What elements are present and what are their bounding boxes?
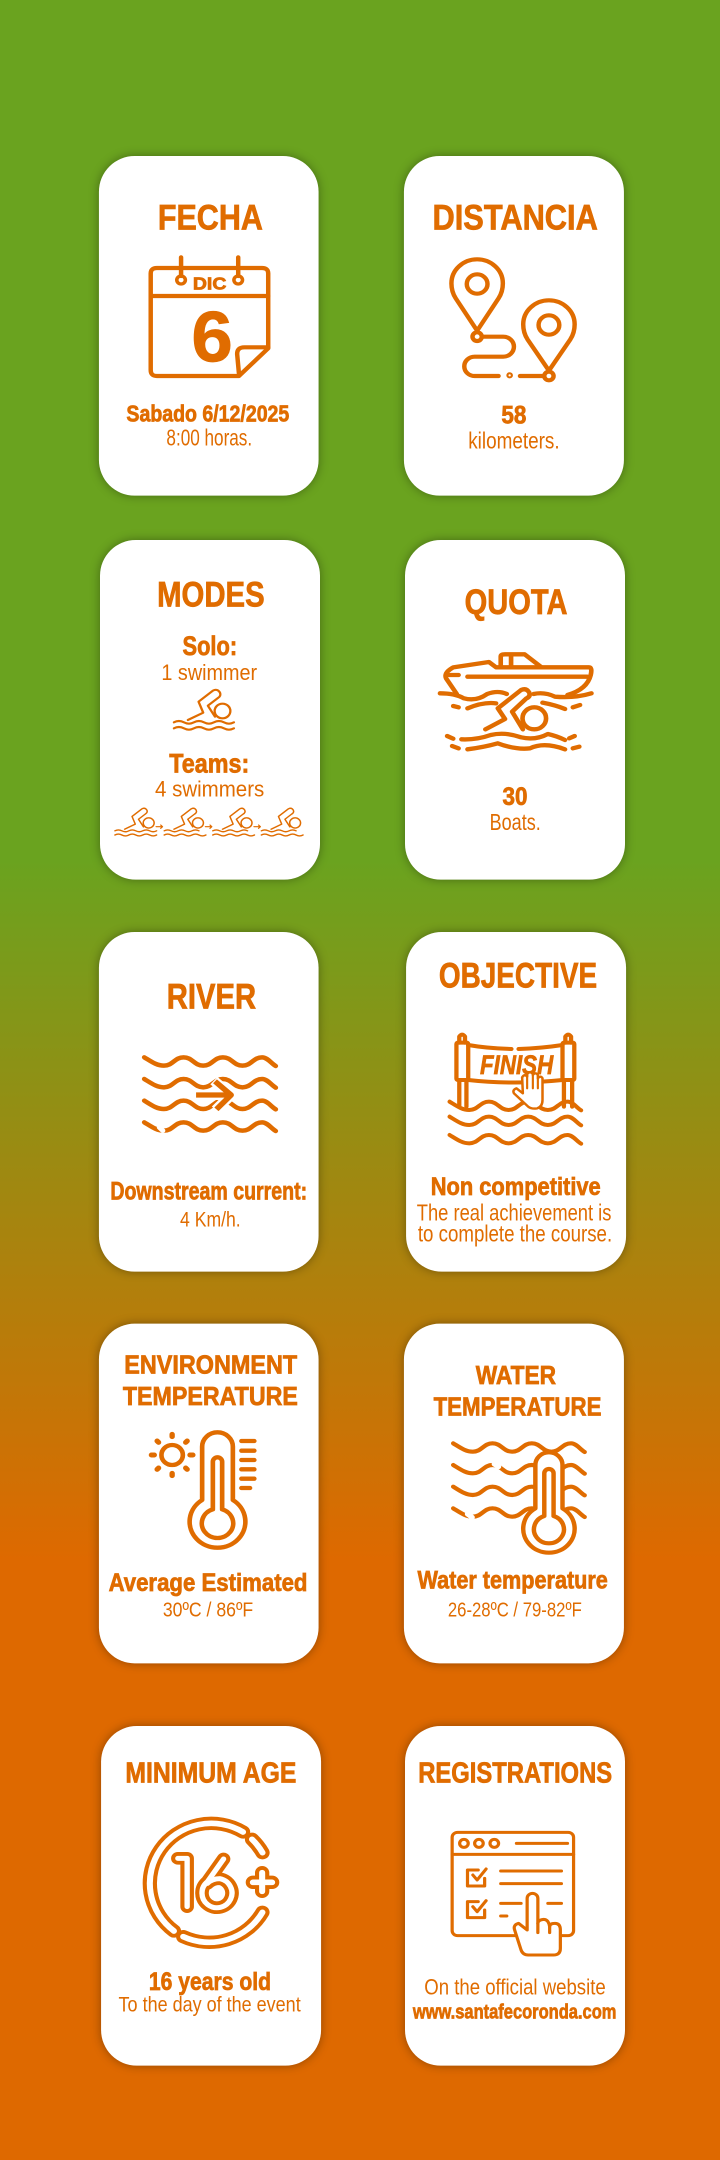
icon: route with two map pins	[451, 259, 575, 380]
panel: modes	[100, 540, 320, 880]
panel: fecha	[99, 156, 319, 496]
heading: distancia: DISTANCIA	[433, 197, 598, 237]
icon: calendar: 6	[191, 297, 233, 377]
date text: Sabado 6/12/2025	[126, 401, 289, 427]
panel: registrations	[405, 1726, 625, 2066]
solo count: 1 swimmer	[161, 660, 257, 685]
heading: water temperature: WATER	[476, 1361, 556, 1390]
solo label: Solo:	[183, 631, 237, 661]
icon: waves and thermometer	[453, 1443, 585, 1553]
icon: web form and pointing hand	[452, 1832, 574, 1955]
panel: objective	[406, 932, 626, 1272]
teams label: Teams:	[169, 748, 249, 778]
icon: calendar: DIC	[193, 274, 226, 293]
heading: objective: OBJECTIVE	[439, 955, 597, 995]
water label: Water temperature	[418, 1565, 608, 1594]
panel: minimum age	[101, 1726, 321, 2066]
heading: environment temperature	[123, 1350, 298, 1411]
icon: boat and swimmer	[440, 654, 591, 749]
teams count: 4 swimmers	[155, 776, 264, 801]
website address: www.santafecoronda.com	[412, 2000, 616, 2023]
panel: environment temperature	[99, 1324, 319, 1663]
heading: environment temperature: ENVIRONMENT	[124, 1350, 297, 1379]
heading: fecha: FECHA	[158, 197, 263, 237]
icon: relay of four swimmers	[115, 808, 303, 836]
icon: sun and thermometer	[151, 1432, 254, 1548]
quota unit: Boats.	[490, 810, 541, 836]
icon: finish banner with hand and waves: FINISH	[480, 1050, 554, 1080]
objective description: The real achievement is	[417, 1200, 611, 1225]
heading: water temperature	[434, 1361, 601, 1421]
age note: To the day of the event	[119, 1992, 301, 2016]
quota value: 30	[503, 784, 528, 811]
heading: environment temperature: TEMPERATURE	[123, 1382, 298, 1411]
heading: river: RIVER	[167, 976, 256, 1016]
icon: single swimmer	[174, 690, 234, 730]
registration note: On the official website	[424, 1974, 606, 1999]
objective description	[417, 1200, 612, 1246]
icon: finish banner with hand and waves	[450, 1035, 581, 1144]
heading: water temperature: TEMPERATURE	[434, 1393, 601, 1421]
temperature values: 30ºC / 86ºF	[163, 1598, 253, 1621]
heading: modes: MODES	[157, 575, 265, 614]
objective label: Non competitive	[431, 1172, 601, 1201]
heading: quota: QUOTA	[465, 582, 568, 622]
distance value: 58	[501, 402, 526, 429]
water values: 26-28ºC / 79-82ºF	[448, 1598, 582, 1621]
panel: water temperature	[404, 1324, 624, 1663]
age value: 16 years old	[149, 1967, 271, 1996]
current label: Downstream current:	[110, 1178, 307, 1205]
current speed: 4 Km/h.	[180, 1207, 241, 1231]
time text: 8:00 horas.	[166, 425, 252, 450]
icon: river waves with arrow	[144, 1057, 276, 1131]
heading: registrations: REGISTRATIONS	[418, 1757, 612, 1789]
heading: minimum age: MINIMUM AGE	[125, 1757, 296, 1789]
temperature label: Average Estimated	[109, 1568, 308, 1597]
icon: 16+ badge	[150, 1823, 272, 1942]
objective description: to complete the course.	[418, 1221, 612, 1246]
distance unit: kilometers.	[468, 428, 560, 454]
panel: river	[99, 932, 319, 1272]
panel: quota	[405, 540, 625, 880]
panel: distancia	[404, 156, 624, 496]
icon: calendar	[151, 257, 268, 377]
